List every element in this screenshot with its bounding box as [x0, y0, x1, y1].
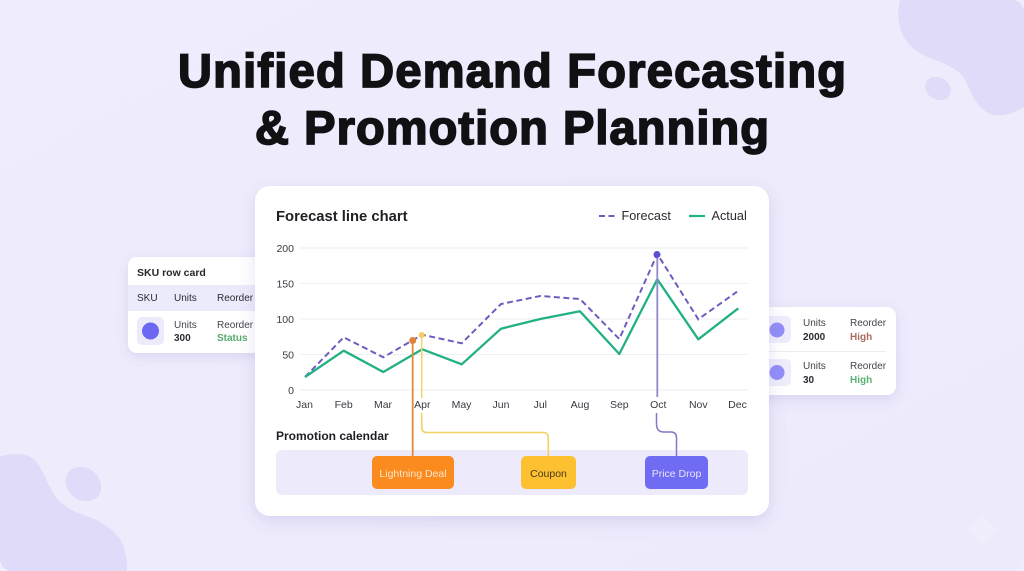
icon: sparkle: [965, 512, 1000, 547]
connector: Coupon: [419, 332, 548, 457]
y axis labels: 0: [288, 385, 294, 397]
SKU card heading: SKU row card: [137, 267, 206, 279]
promo: Coupon: Coupon: [530, 468, 567, 480]
SKU table header: Reorder: [217, 293, 254, 304]
promo: Price Drop: Price Drop: [652, 468, 701, 480]
x axis labels: Oct: [650, 399, 667, 411]
row one values: Reorder: [850, 318, 887, 329]
promo: Lightning Deal: [372, 456, 454, 489]
legend: Forecast: [622, 209, 671, 223]
x axis labels: Sep: [610, 399, 629, 411]
SKU row values: [174, 320, 254, 344]
legend: [599, 209, 747, 223]
SKU table header: Units: [174, 293, 197, 304]
promotion heading: Promotion calendar: [276, 429, 389, 443]
panel: SKU row card: [128, 257, 278, 353]
y axis labels: 200: [276, 243, 294, 255]
promo: Price Drop: [645, 456, 708, 489]
x axis labels: [296, 399, 747, 411]
chart heading: Forecast line chart: [276, 209, 408, 225]
x axis labels: Aug: [571, 399, 589, 411]
x axis labels: Dec: [728, 399, 747, 411]
promo: Coupon: [521, 456, 576, 489]
blob: top right small: [925, 77, 951, 100]
row two values: Units: [803, 361, 826, 372]
y axis labels: 50: [282, 350, 294, 362]
row two values: High: [850, 375, 872, 386]
x axis labels: Feb: [335, 399, 353, 411]
SKU row values: Status: [217, 333, 248, 344]
row one values: 2000: [803, 332, 826, 343]
x axis labels: May: [452, 399, 472, 411]
SKU table header: SKU: [137, 293, 158, 304]
icon: row two thumbnail: [760, 359, 791, 386]
icon: row one thumbnail: [760, 316, 791, 343]
legend: Actual: [712, 209, 747, 223]
x axis labels: Mar: [374, 399, 393, 411]
title: Unified Demand Forecasting: [178, 44, 846, 97]
SKU row values: 300: [174, 333, 191, 344]
row two values: [803, 361, 887, 386]
row two values: Reorder: [850, 361, 887, 372]
x axis labels: Jun: [493, 399, 510, 411]
promotion calendar track: [276, 450, 748, 495]
blob: bottom left: [0, 454, 127, 571]
title: & Promotion Planning: [255, 101, 769, 154]
blob: top right: [898, 0, 1024, 115]
SKU row values: Reorder: [217, 320, 254, 331]
y axis labels: [276, 243, 294, 397]
x axis labels: Jan: [296, 399, 313, 411]
promo: Lightning Deal: Lightning Deal: [379, 468, 447, 480]
forecast line: [305, 254, 737, 377]
x axis labels: Jul: [534, 399, 547, 411]
y axis labels: 100: [276, 314, 294, 326]
SKU table header: [128, 285, 278, 311]
icon: SKU thumbnail: [137, 317, 164, 345]
title: [178, 44, 846, 154]
y axis labels: 150: [276, 278, 294, 290]
row one values: High: [850, 332, 872, 343]
row one values: [803, 318, 887, 343]
panel: right SKU card: [745, 307, 896, 395]
connector: Price Drop: [654, 251, 676, 457]
row two values: 30: [803, 375, 815, 386]
row one values: Units: [803, 318, 826, 329]
connector: Lightning Deal: [409, 337, 416, 457]
blob: bottom left small: [66, 467, 102, 501]
x axis labels: Apr: [414, 399, 431, 411]
SKU row values: Units: [174, 320, 197, 331]
actual line: [305, 279, 738, 377]
line chart: [276, 243, 748, 411]
panel: main chart card: [255, 186, 769, 516]
x axis labels: Nov: [689, 399, 708, 411]
